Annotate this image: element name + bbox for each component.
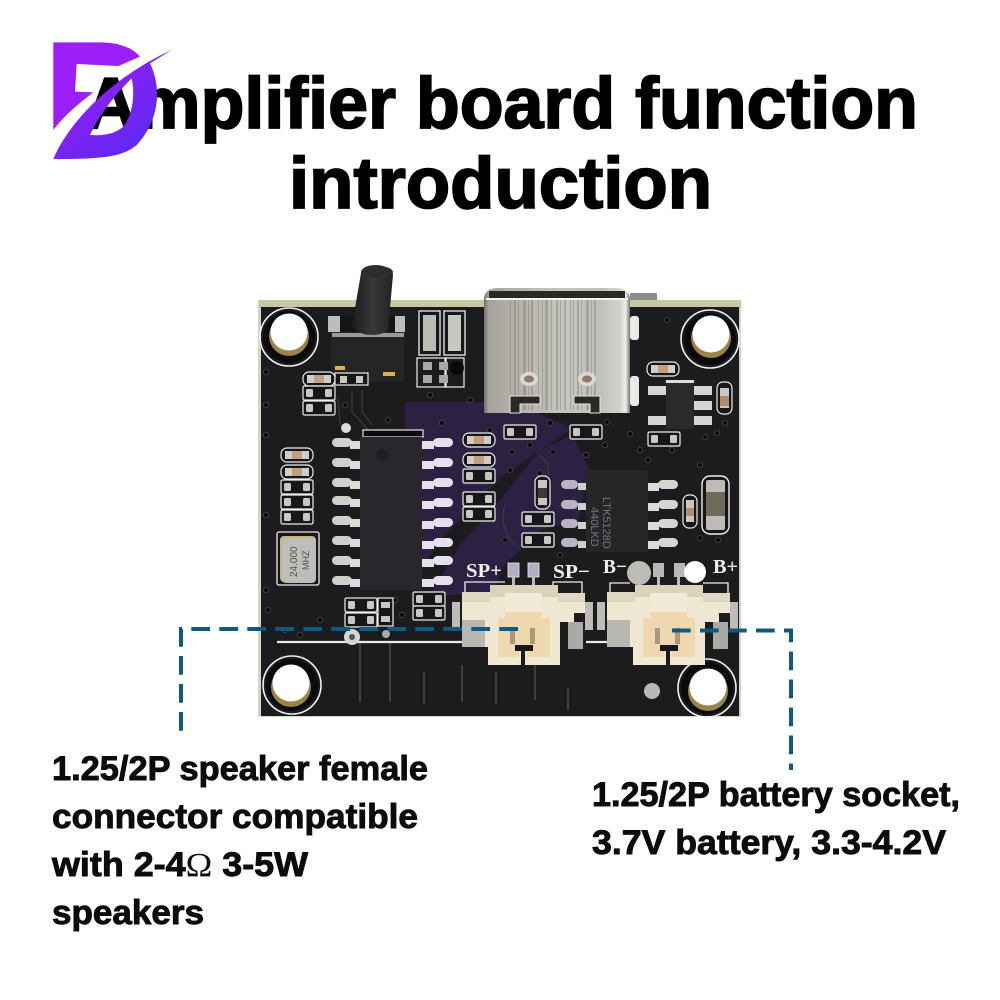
solder pads above connectors <box>465 561 728 595</box>
silkscreen labels: SP+ <box>466 560 502 582</box>
crystal oscillator: MHZ <box>301 550 311 570</box>
vias and traces <box>263 317 728 710</box>
board body <box>258 293 741 717</box>
dashed leader line: battery socket <box>672 630 791 770</box>
push button <box>328 265 405 382</box>
main amplifier chip <box>332 430 453 590</box>
purple logo ghost on board <box>405 402 590 595</box>
LTK5128D chip: 440LKD <box>588 507 600 547</box>
regulator chip <box>648 380 712 429</box>
text block: speaker connector description <box>51 750 428 932</box>
mounting holes <box>260 308 739 717</box>
USB Type-C connector <box>484 288 639 413</box>
LEDs <box>417 311 465 387</box>
text block: speaker connector description: with 2-4Ω 3-5W <box>51 846 309 884</box>
white trace line <box>277 641 607 643</box>
left JST connector <box>452 585 593 665</box>
right JST connector <box>597 585 738 665</box>
amplifier circuit board photo <box>258 265 741 717</box>
text block: battery socket description: 3.7V battery, 3.3-4.2V <box>592 824 946 862</box>
silkscreen labels: B+ <box>713 556 738 578</box>
silkscreen labels: SP− <box>553 561 590 583</box>
text block: speaker connector description: speakers <box>52 894 204 932</box>
silkscreen labels <box>466 556 738 583</box>
text block: battery socket description: 1.25/2P battery socket, <box>592 776 960 814</box>
LTK5128D chip: LTK5128D <box>600 497 612 549</box>
SMD parts <box>281 362 732 627</box>
test pads <box>341 423 660 699</box>
title: Amplifier board function <box>85 64 918 144</box>
silkscreen labels: B− <box>603 556 627 578</box>
title <box>85 64 918 224</box>
LTK5128D chip <box>561 470 678 552</box>
text block: speaker connector description: 1.25/2P speaker female <box>52 750 428 788</box>
dashed leader line: speaker connector <box>181 629 518 735</box>
icon: purple D logo <box>53 42 172 159</box>
text block: speaker connector description: connector compatible <box>52 798 418 836</box>
crystal oscillator: 24.000 <box>289 546 300 577</box>
text block: battery socket description <box>592 776 960 862</box>
crystal oscillator <box>277 532 319 585</box>
title: introduction <box>289 144 712 224</box>
